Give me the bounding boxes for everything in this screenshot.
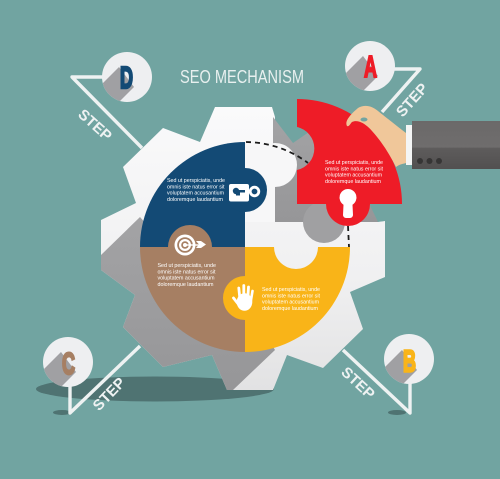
step A label: STEP bbox=[393, 80, 432, 121]
blue text: Sed ut perspiciatis, unde bbox=[167, 178, 225, 184]
panel: tan quadrant bbox=[140, 225, 245, 352]
title: SEO MECHANISM bbox=[180, 66, 304, 87]
yellow text: Sed ut perspiciatis, unde bbox=[262, 287, 320, 293]
badge C bbox=[43, 337, 93, 387]
step A connector bbox=[382, 69, 432, 121]
gear bbox=[101, 107, 385, 390]
step D connector bbox=[72, 77, 142, 148]
sleeve buttons bbox=[417, 158, 442, 164]
gear shadow right bbox=[273, 117, 378, 222]
blue text: doloremque laudantium bbox=[167, 197, 223, 203]
badge B bbox=[384, 334, 434, 384]
badge B: B bbox=[403, 344, 416, 378]
yellow text: doloremque laudantium bbox=[262, 306, 318, 312]
white puzzle piece bbox=[245, 146, 275, 222]
yellow text: voluptatem accusantium bbox=[262, 300, 319, 306]
icon: hand bbox=[234, 286, 252, 311]
panel: yellow quadrant bbox=[223, 247, 350, 352]
gear body bbox=[101, 107, 385, 390]
badge C: C bbox=[62, 346, 75, 381]
step C connector bbox=[70, 346, 140, 414]
sleeve bbox=[412, 121, 500, 169]
ground shadows bbox=[36, 376, 406, 415]
icon: target with arrow bbox=[174, 234, 206, 256]
yellow text: omnis iste natus error sit bbox=[262, 293, 320, 299]
step D label: STEP bbox=[74, 106, 115, 145]
badge D bbox=[102, 52, 152, 102]
empty puzzle socket bbox=[303, 201, 345, 243]
badge A bbox=[345, 41, 395, 91]
panel: red puzzle piece bbox=[297, 99, 402, 226]
red text: doloremque laudantium bbox=[325, 179, 381, 185]
tan text: doloremque laudantium bbox=[158, 282, 214, 288]
dashed outline of missing piece bbox=[246, 142, 349, 247]
icon: key GO bbox=[229, 184, 259, 202]
cuff bbox=[406, 125, 412, 165]
red text: Sed ut perspiciatis, unde bbox=[325, 160, 383, 166]
white puzzle piece bump bbox=[253, 143, 297, 187]
sleeve and hand bbox=[346, 106, 500, 169]
red text: omnis iste natus error sit bbox=[325, 166, 383, 172]
gear shadow left bbox=[101, 217, 275, 390]
icon: keyhole bbox=[340, 189, 356, 218]
step B label: STEP bbox=[338, 364, 378, 403]
badge A: A bbox=[364, 49, 377, 84]
step C label: STEP bbox=[90, 374, 129, 414]
blue text: voluptatem accusantium bbox=[167, 191, 224, 197]
step B connector bbox=[338, 350, 410, 413]
blue text: omnis iste natus error sit bbox=[167, 184, 225, 190]
red text: voluptatem accusantium bbox=[325, 173, 382, 179]
hand bbox=[346, 106, 406, 167]
badge D: D bbox=[120, 60, 133, 95]
tan text: Sed ut perspiciatis, unde bbox=[158, 263, 216, 269]
tan text: voluptatem accusantium bbox=[158, 276, 215, 282]
panel: blue quadrant bbox=[140, 142, 267, 247]
tan text: omnis iste natus error sit bbox=[158, 269, 216, 275]
